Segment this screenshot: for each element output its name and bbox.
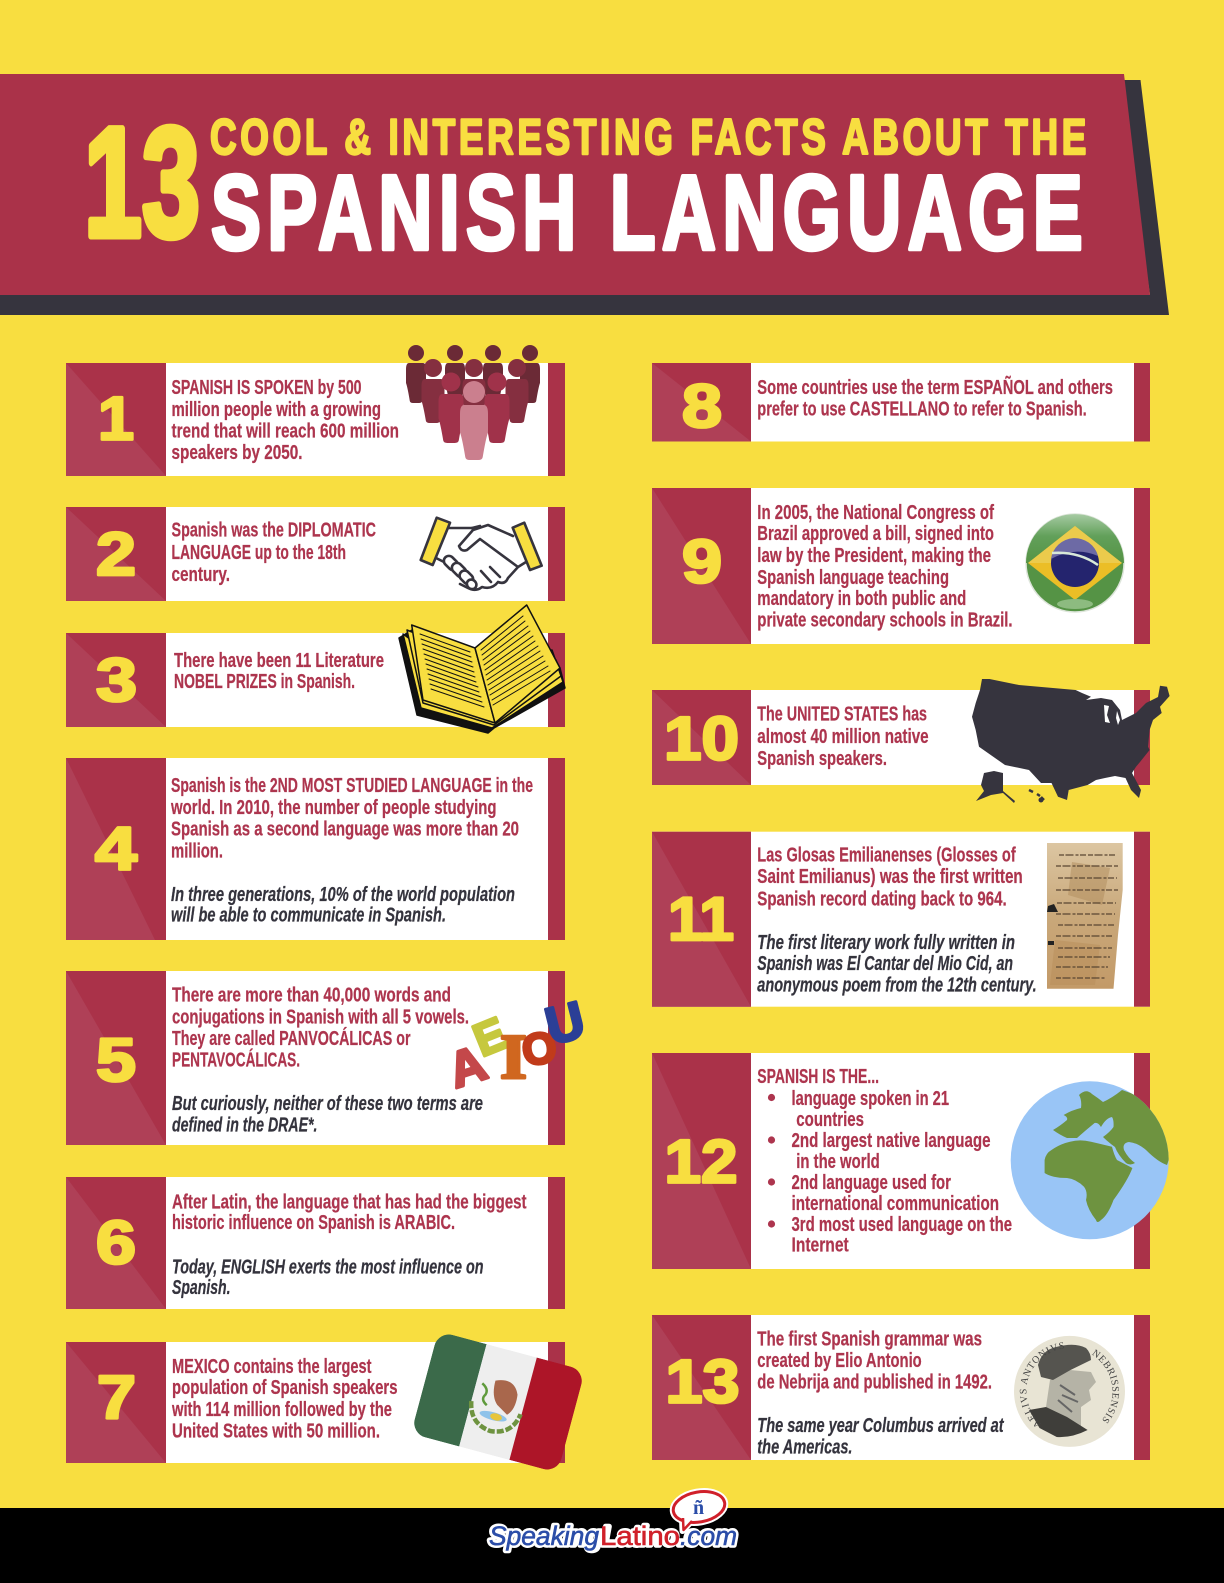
icon: AEIOU letters: O	[519, 1023, 560, 1076]
icon: Mexican flag	[411, 1331, 585, 1473]
fact text: But curiously, neither of these two terms are	[172, 1092, 483, 1115]
fact text: speakers by 2050.	[172, 441, 302, 464]
image: Nebrija medallion	[1014, 1336, 1125, 1447]
number 1: 1	[98, 384, 134, 452]
fact text: Spanish was El Cantar del Mio Cid, an	[757, 952, 1013, 975]
fact text: million people with a growing	[172, 398, 381, 421]
fact text	[171, 1355, 398, 1443]
fact text	[757, 1065, 1012, 1257]
logo wordmark: Speaking	[489, 1521, 599, 1551]
fact text: century.	[172, 563, 230, 586]
fact text: There have been 11 Literature	[174, 649, 384, 672]
fact text: The UNITED STATES has	[757, 703, 927, 726]
card background	[66, 1342, 565, 1463]
fact text: anonymous poem from the 12th century.	[757, 974, 1037, 997]
number 12: 12	[664, 1128, 738, 1196]
fact text: law by the President, making the	[757, 544, 991, 567]
fact text: Spanish speakers.	[757, 747, 887, 770]
number 8: 8	[682, 372, 722, 440]
fact text: million.	[171, 840, 223, 863]
fact text: prefer to use CASTELLANO to refer to Spanish.	[757, 398, 1087, 421]
bubble letter: ñ	[693, 1497, 704, 1519]
fact text: private secondary schools in Brazil.	[757, 609, 1013, 632]
fact text: will be able to communicate in Spanish.	[171, 904, 446, 927]
card background	[652, 690, 1150, 785]
image: manuscript	[1047, 843, 1123, 989]
panel: fact 5	[66, 971, 590, 1145]
fact text: The same year Columbus arrived at	[757, 1414, 1004, 1437]
logo wordmark: Latino	[600, 1521, 680, 1551]
fact text: Today, ENGLISH exerts the most influence on	[172, 1255, 484, 1278]
fact text: Las Glosas Emilianenses (Glosses of	[757, 844, 1016, 867]
title banner	[0, 74, 1169, 315]
icon: map of the United States	[972, 679, 1170, 803]
fact text	[170, 774, 533, 927]
icon: handshake	[421, 518, 542, 591]
card background	[66, 758, 565, 940]
logo speech bubble	[668, 1485, 730, 1531]
fact text	[757, 703, 929, 770]
fact text: They are called PANVOCÁLICAS or	[172, 1027, 411, 1050]
number 4: 4	[95, 814, 137, 882]
fact text: SPANISH IS SPOKEN by 500	[172, 376, 362, 399]
panel: fact 11	[652, 832, 1150, 1007]
fact text: Spanish as a second language was more than 20	[171, 818, 519, 841]
fact text: Spanish record dating back to 964.	[757, 888, 1007, 911]
big number 13: 13	[84, 96, 200, 270]
fact text	[172, 376, 399, 464]
fact text: In 2005, the National Congress of	[757, 501, 994, 524]
fact text: SPANISH IS THE...	[757, 1065, 879, 1088]
fact text: After Latin, the language that has had the biggest	[172, 1190, 527, 1213]
fact text: 3rd most used language on the	[792, 1213, 1012, 1236]
number 7: 7	[97, 1364, 136, 1432]
number 11: 11	[668, 885, 734, 953]
logo wordmark outline: SpeakingLatino.com	[489, 1521, 737, 1551]
card background	[66, 1177, 565, 1309]
panel: fact 4	[66, 758, 565, 940]
fact text: 2nd language used for	[792, 1171, 951, 1194]
fact text	[172, 518, 376, 586]
fact text: The first Spanish grammar was	[757, 1328, 982, 1351]
card background	[652, 832, 1150, 1007]
fact text: MEXICO contains the largest	[172, 1355, 372, 1378]
fact text	[172, 984, 483, 1137]
fact text	[172, 1190, 527, 1299]
fact text: Spanish.	[172, 1276, 230, 1299]
banner ribbon	[0, 74, 1150, 295]
card background	[652, 1053, 1150, 1269]
fact text: mandatory in both public and	[757, 587, 966, 610]
fact text	[174, 649, 384, 693]
card background	[652, 1315, 1150, 1460]
card background	[66, 633, 565, 727]
fact text: Internet	[792, 1234, 849, 1257]
fact text: almost 40 million native	[757, 725, 929, 748]
fact text: countries	[796, 1108, 864, 1131]
medallion inscription: AELIVS ANTONIVS	[1020, 1342, 1064, 1427]
logo wordmark	[489, 1521, 737, 1551]
fact text: world. In 2010, the number of people studying	[170, 796, 496, 819]
fact text: historic influence on Spanish is ARABIC.	[172, 1211, 455, 1234]
number 10: 10	[664, 704, 739, 772]
fact text: Spanish language teaching	[757, 566, 949, 589]
fact text: trend that will reach 600 million	[172, 420, 399, 442]
card background	[66, 363, 565, 476]
number 13: 13	[666, 1348, 740, 1416]
icon: AEIOU letters: A	[441, 1034, 493, 1099]
fact text	[757, 376, 1113, 421]
panel: fact 12	[652, 1053, 1172, 1269]
fact text: created by Elio Antonio	[757, 1349, 922, 1372]
fact text: de Nebrija and published in 1492.	[757, 1371, 992, 1394]
icon: AEIOU letters	[441, 991, 590, 1099]
icon: Brazilian flag button	[1026, 514, 1124, 612]
medallion inscription right: NEBRISSENSIS	[1092, 1349, 1120, 1424]
fact text: Brazil approved a bill, signed into	[757, 522, 994, 545]
number 2: 2	[96, 520, 136, 588]
fact text: United States with 50 million.	[172, 1420, 380, 1443]
icon: crowd of people	[406, 345, 540, 460]
icon: AEIOU letters: U	[540, 991, 590, 1056]
fact text: NOBEL PRIZES in Spanish.	[174, 670, 355, 693]
card background	[66, 971, 565, 1145]
fact text: in the world	[796, 1150, 880, 1173]
fact text: defined in the DRAE*.	[172, 1114, 318, 1137]
logo wordmark: .com	[680, 1521, 737, 1551]
panel: fact 8	[652, 363, 1150, 442]
fact text: international communication	[792, 1192, 999, 1215]
footer band	[0, 1508, 1224, 1583]
card background	[652, 363, 1150, 442]
icon: globe	[1011, 1081, 1172, 1239]
panel: fact 7	[66, 1331, 585, 1473]
logo: SpeakingLatino.com	[489, 1485, 737, 1551]
number 5: 5	[96, 1026, 136, 1094]
card background	[652, 488, 1150, 644]
fact text: language spoken in 21	[792, 1087, 949, 1110]
panel: fact 2	[66, 507, 565, 601]
fact text: There are more than 40,000 words and	[172, 984, 451, 1007]
fact text: Spanish was the DIPLOMATIC	[172, 518, 376, 542]
card background	[66, 507, 565, 601]
fact text	[757, 844, 1037, 997]
panel: fact 1	[66, 345, 565, 476]
fact text: with 114 million followed by the	[171, 1398, 392, 1421]
fact text: LANGUAGE up to the 18th	[172, 541, 346, 564]
fact text: The first literary work fully written in	[757, 931, 1015, 954]
fact text	[757, 501, 1013, 632]
panel: fact 9	[652, 488, 1150, 644]
panel: fact 10	[652, 679, 1170, 803]
fact text: 2nd largest native language	[792, 1129, 990, 1152]
fact text: Saint Emilianus) was the first written	[757, 865, 1023, 888]
number 6: 6	[96, 1208, 136, 1276]
icon: AEIOU letters: I	[500, 1021, 527, 1092]
fact text: population of Spanish speakers	[172, 1376, 398, 1399]
fact text: conjugations in Spanish with all 5 vowels.	[172, 1005, 469, 1028]
panel: fact 3	[66, 605, 565, 733]
number 9: 9	[682, 528, 722, 596]
icon: open book	[399, 605, 565, 733]
number 3: 3	[96, 646, 137, 714]
fact text: In three generations, 10% of the world population	[171, 883, 515, 906]
banner shadow	[0, 80, 1169, 315]
fact text: the Americas.	[757, 1436, 852, 1459]
fact text	[757, 1328, 1004, 1459]
panel: fact 13	[652, 1315, 1150, 1460]
icon: AEIOU letters: E	[466, 1007, 514, 1066]
fact text: PENTAVOCÁLICAS.	[172, 1049, 300, 1072]
panel: fact 6	[66, 1177, 565, 1309]
fact text: Spanish is the 2ND MOST STUDIED LANGUAGE in the	[171, 774, 533, 797]
